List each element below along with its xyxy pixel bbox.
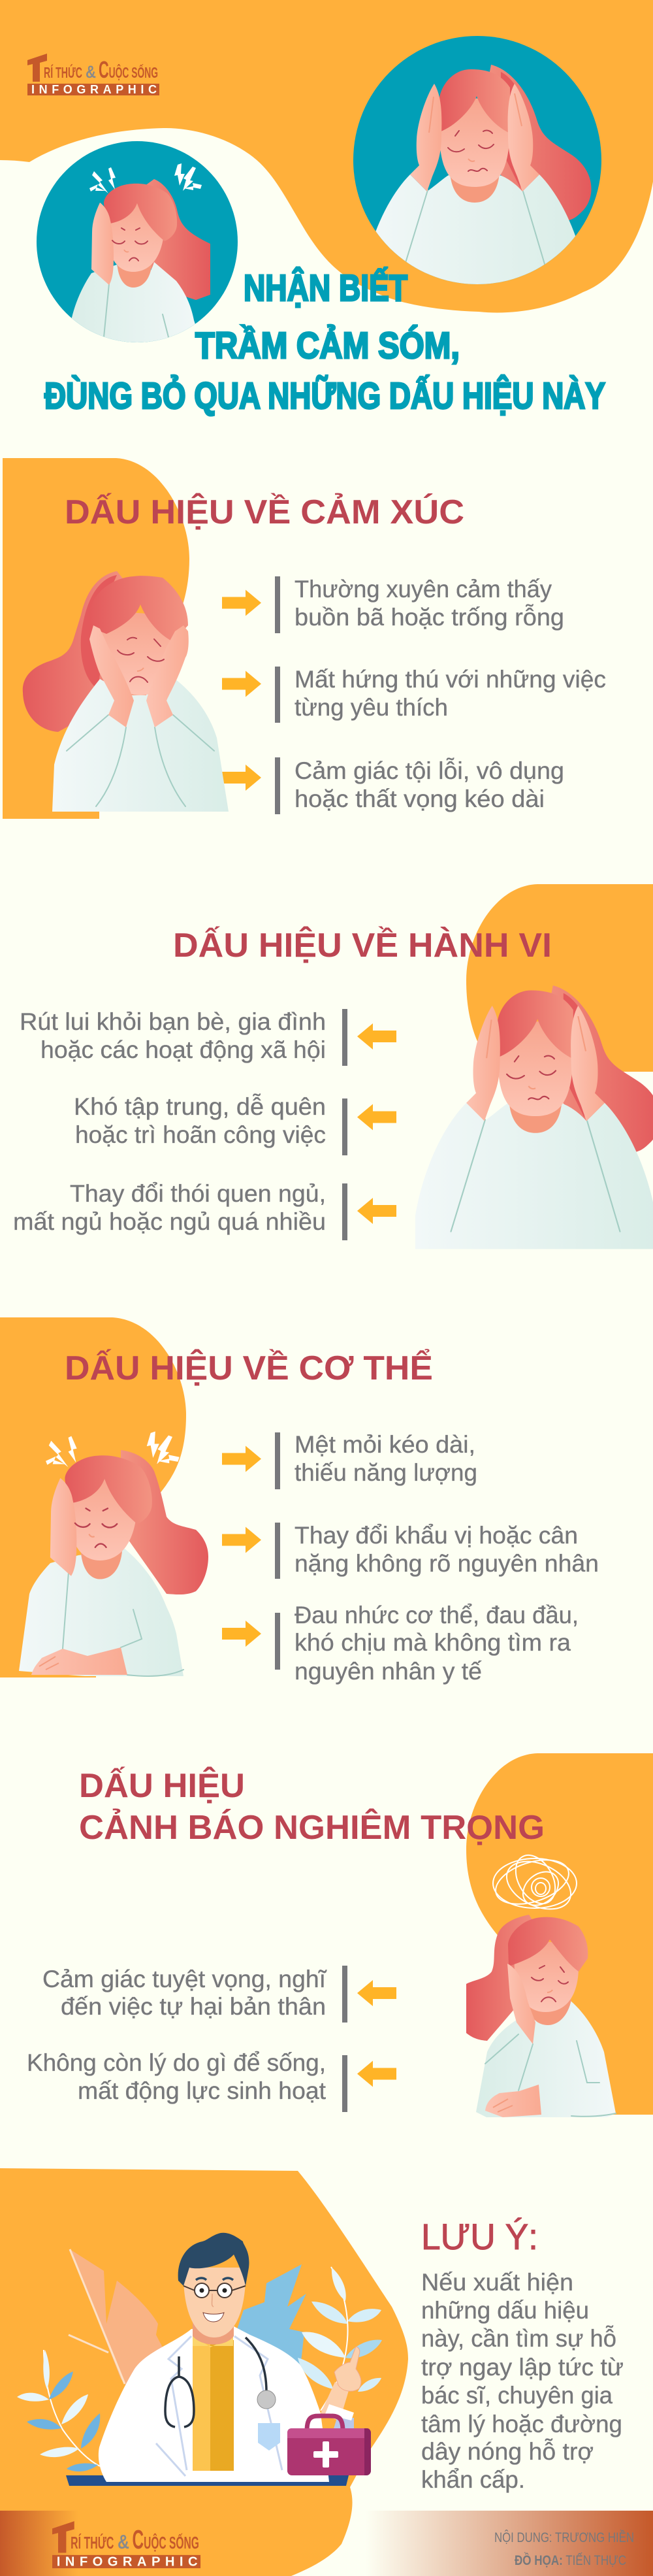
illustration: girl with headache in small teal circle	[37, 141, 238, 346]
sign item 3: Đau nhức cơ thể, đau đầu,	[295, 1602, 579, 1628]
illustration: girl in large teal circle	[353, 36, 601, 311]
sign item 2: mất động lực sinh hoạt	[78, 2077, 326, 2104]
sign item 2: Mất hứng thú với những việc	[295, 666, 606, 693]
panel: physical signs	[0, 1317, 599, 1685]
orange backdrop	[0, 1317, 186, 1677]
sign item 1: hoặc các hoạt động xã hội	[40, 1036, 326, 1063]
sign item 1	[275, 1431, 477, 1489]
sign item 3	[275, 757, 564, 814]
header orange wave	[0, 0, 653, 312]
footer logo: CUỘC SỐNG	[133, 2524, 199, 2554]
logo: Tri thuc & Cuoc song Infographic	[27, 54, 159, 96]
sign item 3: nguyên nhân y tế	[295, 1658, 482, 1685]
glasses and features	[183, 2283, 246, 2298]
illustration: doctor	[99, 2233, 361, 2482]
illustration: girl covering ears	[415, 985, 653, 1249]
footer logo	[52, 2521, 200, 2569]
footer logo: INFOGRAPHIC	[57, 2555, 198, 2569]
title: NHẬN BIẾT	[244, 267, 407, 309]
shirt	[193, 2340, 210, 2471]
orange backdrop	[0, 2168, 408, 2576]
title: TRẦM CẢM SÓM,	[195, 324, 460, 367]
title	[44, 267, 605, 417]
sign item 3: Cảm giác tội lỗi, vô dụng	[295, 757, 564, 784]
heading: serious warning signs	[79, 1766, 545, 1847]
pocket	[258, 2423, 280, 2451]
illustration: girl resting head on hand	[466, 1915, 616, 2117]
sign item 1: Thường xuyên cảm thấy	[295, 576, 552, 603]
sign item 2: Thay đổi khẩu vị hoặc cân	[295, 1522, 578, 1549]
note heading: LƯU Ý:	[421, 2216, 538, 2257]
sign item 1	[20, 1008, 396, 1066]
note body text: tâm lý hoặc đường	[421, 2411, 622, 2437]
note body text: Nếu xuất hiện	[421, 2269, 573, 2296]
panel: emotional signs	[3, 458, 606, 819]
footer logo: &	[118, 2532, 129, 2553]
logo: Tri thuc & Cuoc song Infographic: RÍ THỨC	[44, 63, 82, 81]
sign item 2	[275, 1522, 599, 1579]
heading: behaviour signs: DẤU HIỆU VỀ HÀNH VI	[173, 926, 552, 965]
panel: serious warning signs	[27, 1753, 653, 2117]
sign item 3: hoặc thất vọng kéo dài	[295, 785, 545, 812]
footer band	[0, 2511, 653, 2576]
illustration: desk	[66, 2475, 349, 2486]
logo: Tri thuc & Cuoc song Infographic: CUỘC SỐNG	[99, 56, 158, 83]
panel: behaviour signs	[13, 884, 653, 1249]
sign item 2	[27, 2049, 396, 2112]
arrows	[222, 1445, 261, 1647]
lapels and coat shading	[156, 2336, 282, 2476]
note body text	[421, 2269, 624, 2493]
note body text: khẩn cấp.	[421, 2466, 525, 2493]
sign item 3: Thay đổi thói quen ngủ,	[70, 1180, 326, 1207]
sign item 1: thiếu năng lượng	[295, 1459, 477, 1486]
sign item 3	[13, 1180, 396, 1240]
sign item 1: Rút lui khỏi bạn bè, gia đình	[20, 1008, 326, 1035]
sign item 1: buồn bã hoặc trống rỗng	[295, 604, 564, 631]
icon: medical bag	[287, 2416, 371, 2475]
stethoscope	[165, 2337, 266, 2427]
note body text: trợ ngay lập tức từ	[421, 2354, 624, 2381]
illustration: right branch	[298, 2267, 382, 2411]
illustration: blue leaf	[235, 2264, 306, 2385]
panel: note with doctor	[0, 2168, 624, 2576]
orange backdrop	[466, 1753, 653, 2115]
coat	[99, 2326, 329, 2482]
sign item 1: đến việc tự hại bản thân	[61, 1993, 326, 2020]
forearm and raised hand	[321, 2347, 361, 2431]
note body text: này, cần tìm sự hỗ	[421, 2325, 616, 2352]
illustration: girl holding cheeks	[23, 571, 229, 812]
sign item 1	[42, 1966, 396, 2023]
heading: emotional signs: DẤU HIỆU VỀ CẢM XÚC	[65, 493, 464, 531]
footer credits: ĐỒ HỌA: TIẾN THỰC	[515, 2552, 626, 2568]
sign item 2	[74, 1093, 396, 1155]
sign item 2: Không còn lý do gì để sống,	[27, 2049, 326, 2076]
hair	[178, 2233, 249, 2286]
sign item 2: hoặc trì hoãn công việc	[75, 1121, 326, 1148]
note body text: dây nóng hỗ trợ	[421, 2438, 594, 2465]
sign item 2: nặng không rõ nguyên nhân	[295, 1550, 599, 1577]
sign item 3: khó chịu mà không tìm ra	[295, 1629, 571, 1656]
footer credits	[494, 2530, 634, 2568]
heading: serious warning signs: CẢNH BÁO NGHIÊM TRỌNG	[79, 1808, 545, 1847]
arrows	[222, 589, 261, 791]
sign item 1: Mệt mỏi kéo dài,	[295, 1431, 475, 1458]
sign item 3	[275, 1602, 579, 1685]
illustration: peach leaves	[69, 2249, 165, 2392]
heading: physical signs: DẤU HIỆU VỀ CƠ THỂ	[65, 1349, 433, 1387]
sign item 3: mất ngủ hoặc ngủ quá nhiều	[13, 1208, 326, 1235]
sign item 2: Khó tập trung, dễ quên	[74, 1093, 326, 1120]
sign item 1	[275, 576, 564, 633]
sign item 2	[275, 666, 606, 723]
illustration: left branch	[17, 2350, 100, 2471]
orange backdrop	[466, 884, 653, 1072]
orange backdrop	[3, 458, 189, 819]
footer logo: RÍ THỨC	[71, 2533, 114, 2552]
illustration: girl with headache at desk	[19, 1431, 208, 1676]
note body text: bác sĩ, chuyên gia	[421, 2382, 613, 2409]
note body text: những dấu hiệu	[421, 2297, 589, 2324]
heading: serious warning signs: DẤU HIỆU	[79, 1766, 245, 1805]
logo: Tri thuc & Cuoc song Infographic: &	[86, 62, 96, 82]
logo: Tri thuc & Cuoc song Infographic: INFOGRAPHIC	[31, 83, 157, 96]
sign item 1: Cảm giác tuyệt vọng, nghĩ	[42, 1966, 327, 1992]
icon: tangled thought scribble	[490, 1848, 579, 1919]
sign item 2: từng yêu thích	[295, 694, 448, 721]
neck and face	[193, 2313, 234, 2345]
